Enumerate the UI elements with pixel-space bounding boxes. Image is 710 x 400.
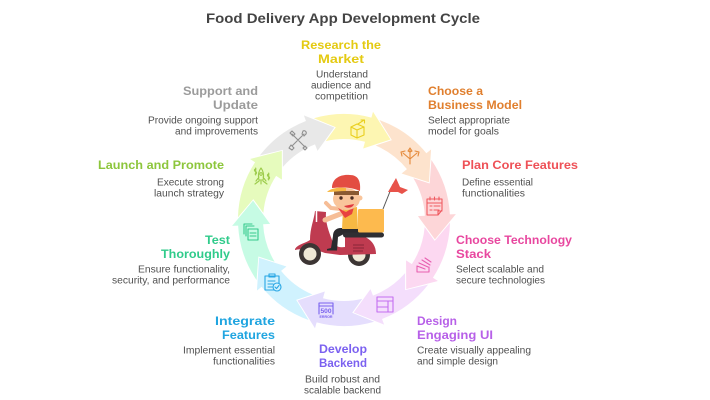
- heading: Support and: [183, 84, 258, 98]
- step: test thoroughly: [112, 233, 230, 286]
- arrow: research: [314, 112, 390, 148]
- face: [339, 196, 354, 208]
- heading: Launch and Promote: [98, 158, 224, 172]
- description: scalable backend: [304, 386, 381, 396]
- step: plan core features: [462, 158, 578, 200]
- description: [428, 116, 510, 138]
- step: research the market: [301, 38, 381, 102]
- description: Implement essential: [183, 346, 275, 356]
- icon: 500 error window: 500: [320, 309, 332, 315]
- front wheel: [299, 243, 321, 265]
- handlebar: [316, 211, 318, 222]
- arrow: support: [256, 105, 340, 180]
- heading: [161, 233, 230, 261]
- description: [417, 346, 531, 368]
- icon: 500 error window: ERROR: [320, 314, 333, 319]
- icon: 500 error window: [319, 303, 333, 319]
- arrow: technology stack: [398, 213, 456, 298]
- step: choose a business model: [428, 84, 522, 138]
- arrow: design UI: [348, 260, 432, 335]
- step: integrate features: [183, 314, 275, 368]
- description: Select scalable and: [456, 264, 544, 276]
- step: launch and promote: [98, 158, 224, 200]
- arrow: integrate: [243, 251, 326, 325]
- heading: Update: [213, 98, 258, 112]
- heading: Design: [417, 314, 457, 328]
- description: launch strategy: [154, 188, 224, 200]
- rider shirt: [342, 207, 358, 229]
- scarf: [338, 207, 354, 218]
- description: [456, 264, 545, 286]
- rider legs: [327, 228, 360, 250]
- icon: code stack: [417, 258, 431, 272]
- description: audience and: [311, 80, 371, 92]
- description: Execute strong: [157, 178, 224, 188]
- icon: branching arrows: [401, 148, 419, 164]
- scooter body: [295, 211, 376, 255]
- heading: [428, 84, 522, 112]
- description: [154, 178, 224, 200]
- description: [462, 178, 533, 200]
- description: functionalities: [213, 356, 275, 368]
- description: [311, 70, 371, 102]
- description: competition: [315, 92, 368, 102]
- heading: Test: [205, 233, 230, 247]
- heading: Market: [318, 52, 364, 66]
- description: Build robust and: [305, 374, 380, 386]
- heading: [301, 38, 381, 66]
- heading: Integrate: [215, 314, 275, 328]
- step: choose technology stack: [456, 233, 572, 286]
- heading: Choose Technology: [456, 233, 572, 247]
- heading: Business Model: [428, 98, 522, 112]
- arrow: test: [227, 198, 285, 282]
- cap: [327, 175, 360, 192]
- title: Food Delivery App Development Cycle: [206, 10, 480, 26]
- step: develop backend: [304, 342, 381, 396]
- illustration: delivery rider on scooter: [295, 175, 408, 266]
- icon: clipboard check: [265, 274, 281, 291]
- heading: [319, 342, 367, 370]
- description: and simple design: [417, 356, 498, 368]
- arrow: backend: [298, 292, 374, 328]
- description: secure technologies: [456, 276, 545, 286]
- description: Ensure functionality,: [138, 264, 230, 276]
- arrow: business model: [362, 115, 445, 189]
- heading: Research the: [301, 38, 381, 52]
- heading: Thoroughly: [161, 247, 230, 261]
- description: [148, 116, 258, 138]
- description: [304, 374, 381, 396]
- description: security, and performance: [112, 276, 230, 286]
- description: and improvements: [175, 126, 258, 138]
- heading: Develop: [319, 342, 367, 356]
- description: functionalities: [462, 188, 525, 200]
- arrow: core features: [403, 158, 461, 242]
- step: design engaging UI: [417, 314, 531, 368]
- heading: Engaging UI: [417, 328, 493, 342]
- delivery box: [358, 209, 384, 232]
- description: [183, 346, 275, 368]
- rider arms: [325, 203, 343, 220]
- rear wheel: [348, 244, 370, 266]
- description: Create visually appealing: [417, 346, 531, 356]
- flag: [383, 178, 408, 209]
- heading: [456, 233, 572, 261]
- step: support and update: [148, 84, 258, 138]
- icon: box: [351, 120, 364, 138]
- description: model for goals: [428, 126, 499, 138]
- icon: document stack: [244, 224, 258, 240]
- icon: calendar checklist: [427, 197, 442, 215]
- heading: Stack: [456, 247, 491, 261]
- description: Understand: [316, 70, 368, 80]
- heading: Plan Core Features: [462, 158, 578, 172]
- cycle ring of arrows: [227, 105, 461, 335]
- heading: [183, 84, 258, 112]
- scooter grille: [353, 245, 364, 251]
- seat: [343, 232, 384, 238]
- arrow: launch: [232, 142, 290, 227]
- heading: [417, 314, 493, 342]
- description: Provide ongoing support: [148, 116, 258, 126]
- rider head: [333, 188, 362, 210]
- icon: rocket with dollars: [254, 168, 270, 184]
- heading: Choose a: [428, 84, 483, 98]
- heading: [215, 314, 275, 342]
- icon: crossed tools: [289, 131, 307, 150]
- heading: Backend: [319, 356, 367, 370]
- description: Select appropriate: [428, 116, 510, 126]
- heading: Features: [222, 328, 275, 342]
- description: Define essential: [462, 178, 533, 188]
- icon: layout window: [377, 297, 393, 312]
- description: [112, 264, 230, 286]
